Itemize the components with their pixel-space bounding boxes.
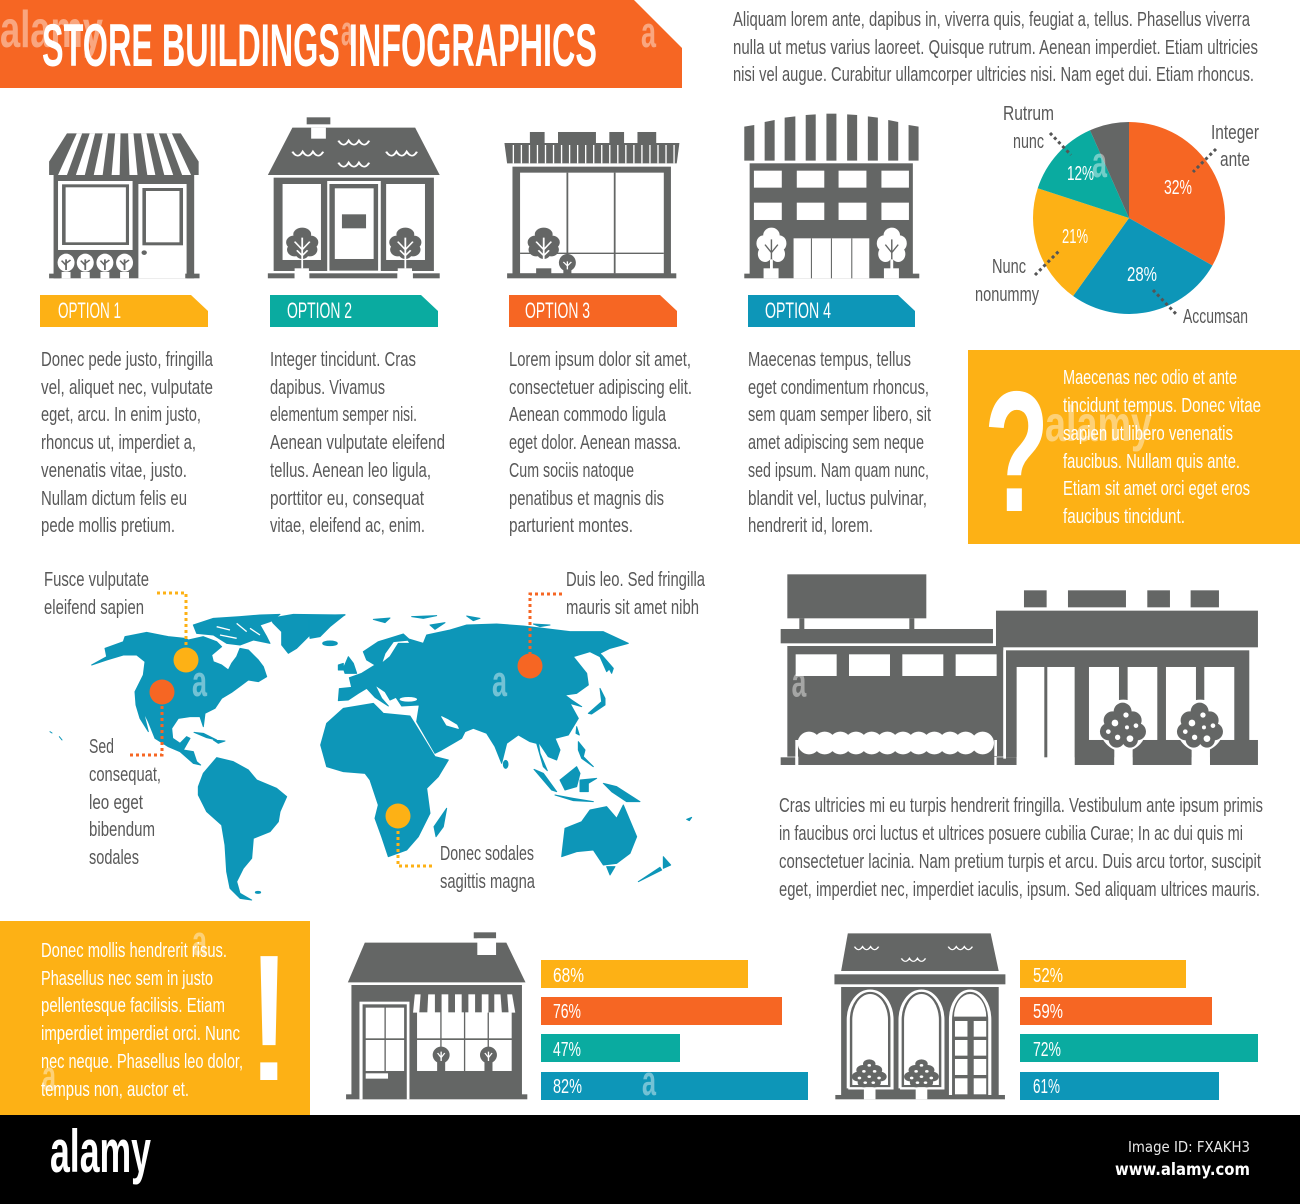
option 4 text: blandit vel, luctus pulvinar, — [748, 487, 927, 510]
option 3 text: Aenean commodo ligula — [509, 403, 666, 426]
title banner: a — [641, 8, 656, 57]
option 2 text: vitae, eleifend ac, enim. — [270, 514, 425, 537]
map pin: russia — [518, 594, 562, 678]
option 3 text: parturient montes. — [509, 514, 633, 537]
map label: sed: sodales — [89, 846, 139, 869]
map label: sed: Sed — [89, 735, 114, 758]
pie chart: Integer — [1211, 121, 1259, 144]
footer band — [0, 1115, 1300, 1204]
option 3 text: Cum sociis natoque — [509, 459, 634, 482]
map pin: north america north — [157, 593, 198, 672]
bar chart: left: a — [642, 1057, 656, 1104]
watermark marks on map — [192, 657, 507, 706]
callout: exclamation: a — [42, 1052, 56, 1099]
option 1 label — [40, 295, 208, 327]
bar chart: left: 47% — [553, 1038, 581, 1061]
callout: exclamation: Phasellus nec sem in justo — [41, 967, 213, 990]
callout: exclamation: ! — [244, 918, 294, 1119]
callout: question: sapien ut libero venenatis — [1063, 422, 1233, 445]
option 1 text: pede mollis pretium. — [41, 514, 175, 537]
pie chart: 32% — [1164, 176, 1192, 199]
large store text — [779, 794, 1263, 901]
map pin: north america south — [129, 680, 174, 755]
icon: store option 3 — [504, 132, 679, 278]
option 1 text — [41, 348, 213, 537]
option 2 text: tellus. Aenean leo ligula, — [270, 459, 431, 482]
footer band: Image ID: FXAKH3 — [1128, 1138, 1250, 1156]
map label: donec: sagittis magna — [440, 870, 535, 893]
icon: store with arches — [834, 933, 1005, 1099]
callout: exclamation — [0, 917, 310, 1119]
pie chart: 21% — [1062, 225, 1088, 248]
icon: store option 1 — [49, 133, 200, 278]
bar chart: left: 76% — [553, 1000, 581, 1023]
intro text — [733, 8, 1258, 86]
title banner: alamy — [0, 1, 103, 59]
icon: large store: a — [792, 659, 807, 707]
option 1 text: vel, aliquet nec, vulputate — [41, 376, 213, 399]
bar chart: right — [1020, 960, 1258, 1100]
option 2 text — [270, 348, 445, 537]
option 1 text: Donec pede justo, fringilla — [41, 348, 213, 371]
map label: donec: Donec sodales — [440, 842, 534, 865]
icon: store option 2 — [268, 117, 440, 278]
option 4 text: Maecenas tempus, tellus — [748, 348, 911, 371]
map label: duis: mauris sit amet nibh — [566, 596, 699, 619]
option 1 label: OPTION 1 — [58, 298, 121, 323]
callout: exclamation: imperdiet imperdiet orci. Nunc — [41, 1022, 240, 1045]
pie chart: a — [1092, 138, 1107, 187]
option 2 text: elementum semper nisi. — [270, 403, 417, 426]
bar chart: right: 59% — [1033, 1000, 1063, 1023]
watermark marks on map: a — [192, 657, 207, 706]
map label: sed: leo eget — [89, 791, 143, 814]
pie chart: 12% — [1067, 162, 1094, 185]
option 1 text: venenatis vitae, justo. — [41, 459, 187, 482]
pie chart — [975, 102, 1259, 328]
option 3 label — [509, 295, 677, 327]
bar chart: left: 82% — [553, 1075, 582, 1098]
option 2 label — [270, 295, 438, 327]
map label: fusce: eleifend sapien — [44, 596, 144, 619]
pie chart: nunc — [1013, 130, 1044, 153]
option 3 text — [509, 348, 692, 537]
pie chart: nonummy — [975, 283, 1040, 306]
option 4 text: amet adipiscing sem neque — [748, 431, 924, 454]
bar chart: left — [541, 960, 808, 1104]
title banner: STORE BUILDINGS INFOGRAPHICS — [42, 12, 597, 79]
option 4 label — [748, 295, 915, 327]
map pin: southern africa — [386, 804, 434, 866]
title banner — [0, 0, 682, 88]
icon: large store — [781, 574, 1258, 765]
option 2 text: Aenean vulputate eleifend — [270, 431, 445, 454]
map label: donec — [440, 842, 535, 893]
option 2 label: OPTION 2 — [287, 298, 352, 323]
option 4 text: hendrerit id, lorem. — [748, 514, 873, 537]
callout: question: faucibus tincidunt. — [1063, 505, 1185, 528]
bar chart: right: 61% — [1033, 1075, 1060, 1098]
map label: fusce: Fusce vulputate — [44, 568, 149, 591]
map label: fusce — [44, 568, 149, 619]
callout: question: ? — [984, 356, 1049, 548]
callout: exclamation: Donec mollis hendrerit risus. — [41, 939, 227, 962]
bar chart: right: 72% — [1033, 1038, 1061, 1061]
option 4 text: sem quam semper libero, sit — [748, 403, 931, 426]
option 3 text: eget dolor. Aenean massa. — [509, 431, 681, 454]
icon: store option 4 — [744, 114, 919, 278]
watermark marks on map: a — [492, 657, 507, 706]
option 3 label: OPTION 3 — [525, 298, 590, 323]
callout: exclamation: a — [192, 917, 207, 964]
title banner: a — [341, 7, 353, 54]
option 4 text: sed ipsum. Nam quam nunc, — [748, 459, 929, 482]
pie chart: Nunc — [992, 255, 1026, 278]
map label: sed — [89, 735, 161, 869]
option 2 text: Integer tincidunt. Cras — [270, 348, 416, 371]
callout: exclamation: pellentesque facilisis. Etiam — [41, 994, 225, 1017]
option 4 text: eget condimentum rhoncus, — [748, 376, 929, 399]
pie chart: Accumsan — [1183, 305, 1248, 328]
pie chart: 28% — [1127, 263, 1157, 286]
option 1 text: Nullam dictum felis eu — [41, 487, 187, 510]
pie chart: ante — [1220, 148, 1250, 171]
callout: question — [968, 350, 1300, 548]
option 3 text: penatibus et magnis dis — [509, 487, 664, 510]
map label: duis — [566, 568, 705, 619]
option 1 text: rhoncus ut, imperdiet a, — [41, 431, 196, 454]
option 3 text: Lorem ipsum dolor sit amet, — [509, 348, 691, 371]
footer band: alamy — [50, 1118, 151, 1185]
option 1 text: eget, arcu. In enim justo, — [41, 403, 201, 426]
callout: question: alamy — [1045, 396, 1152, 452]
map label: sed: bibendum — [89, 818, 155, 841]
bar chart: right: 52% — [1033, 964, 1063, 987]
callout: exclamation: tempus non, auctor et. — [41, 1078, 189, 1101]
option 2 text: dapibus. Vivamus — [270, 376, 385, 399]
bar chart: left: 68% — [553, 964, 584, 987]
map label: duis: Duis leo. Sed fringilla — [566, 568, 705, 591]
footer band: www.alamy.com — [1115, 1160, 1250, 1180]
option 4 text — [748, 348, 931, 537]
icon: store with awning — [346, 932, 527, 1099]
option 2 text: porttitor eu, consequat — [270, 487, 424, 510]
option 4 label: OPTION 4 — [765, 298, 831, 323]
pie chart: Rutrum — [1003, 102, 1054, 125]
callout: exclamation: nec neque. Phasellus leo dolor, — [41, 1050, 243, 1073]
option 3 text: consectetuer adipiscing elit. — [509, 376, 692, 399]
world map — [50, 614, 692, 900]
map label: sed: consequat, — [89, 763, 161, 786]
